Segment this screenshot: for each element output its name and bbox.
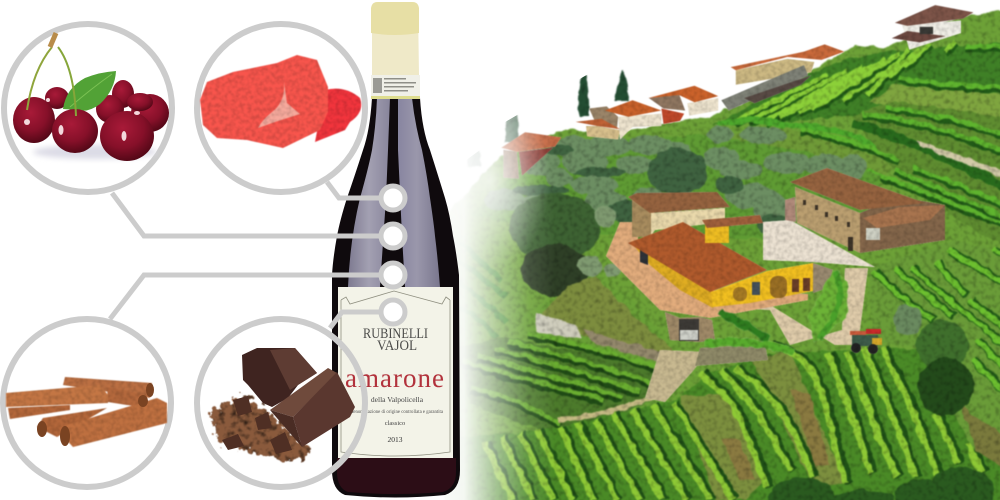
chocolate chunks — [222, 396, 292, 454]
brown soil — [722, 390, 830, 480]
front cherries — [13, 97, 154, 161]
stick ends — [37, 383, 154, 446]
connector: cinnamon — [110, 275, 382, 319]
olive tree — [893, 305, 922, 336]
chocolate block back — [242, 348, 317, 407]
vineyard landscape photo — [425, 0, 1000, 500]
bottom tree line — [768, 467, 994, 500]
producer name: RUBINELLI — [363, 326, 428, 342]
left house — [628, 192, 730, 237]
hillside base — [445, 10, 1000, 500]
east soil — [961, 405, 1000, 477]
leaf — [63, 71, 116, 111]
chocolate shavings — [210, 395, 310, 460]
mound — [537, 276, 672, 364]
back cherries — [45, 80, 169, 132]
dot markers — [381, 186, 405, 324]
terrace ground — [455, 338, 677, 431]
stone terrace wall — [915, 139, 1000, 184]
east vine rows shadow — [801, 49, 1000, 231]
east vineyard (scaled group) — [768, 240, 1000, 500]
lower hill (scaled group) — [445, 235, 1000, 500]
roads and courtyard — [606, 220, 875, 402]
dark round tree — [918, 357, 973, 415]
wine name: amarone — [345, 363, 445, 393]
callout connector lines and dots — [110, 182, 405, 328]
curved hedge — [718, 120, 899, 160]
front label — [338, 287, 453, 458]
olive grove ground — [470, 135, 880, 240]
olive trees — [485, 126, 867, 223]
east rows — [873, 248, 1000, 405]
east vineyard ground — [868, 240, 1000, 477]
upper vineyard ground — [713, 41, 1000, 134]
hillside terrain and vines — [445, 10, 1000, 500]
yellow winery — [628, 215, 833, 342]
label border — [341, 291, 450, 456]
chocolate block front — [270, 368, 355, 447]
upper vine rows — [734, 41, 956, 122]
grass terrace — [868, 85, 1000, 119]
connector: strawberry — [327, 182, 382, 198]
dark cypress trees — [468, 67, 628, 166]
producer name — [363, 326, 428, 354]
aroma circle: cinnamon — [3, 319, 171, 487]
east dark hedge — [853, 124, 1000, 194]
stems — [27, 33, 76, 116]
stone wall south — [582, 329, 669, 366]
neck capsule — [371, 2, 420, 99]
strawberry pieces — [200, 55, 361, 148]
vintage: 2013 — [388, 435, 403, 444]
left reflection — [348, 98, 390, 287]
classico: classico — [385, 420, 405, 427]
east vine rows — [801, 46, 1000, 229]
upper vine rows shadow — [735, 43, 957, 124]
aroma circle: chocolate — [197, 319, 365, 487]
pale olive trees — [577, 205, 620, 277]
shadow — [33, 145, 157, 159]
cherry highlights — [24, 98, 140, 141]
east terrace ground — [850, 101, 1000, 248]
aroma circle: dried strawberry — [197, 24, 365, 192]
west slope ground — [445, 235, 687, 457]
left vine rows shadow — [486, 402, 735, 500]
faded west rows — [450, 235, 506, 338]
denomination: denominazione di origine controllata e garantita — [351, 410, 444, 415]
cinnamon sticks — [6, 377, 167, 447]
lower glass tint — [337, 458, 456, 494]
misty fade on left of landscape — [425, 0, 640, 500]
right vine rows shadow — [703, 345, 985, 487]
round tree — [917, 320, 968, 370]
connector: chocolate — [330, 312, 382, 328]
stone wall west — [535, 314, 582, 339]
bottom vineyard ground — [445, 348, 1000, 500]
right vine rows — [700, 345, 982, 487]
soil strips — [680, 350, 845, 500]
east rows shadow — [875, 249, 1000, 406]
neck strip label — [371, 75, 420, 99]
dirt track — [558, 364, 679, 419]
hillside houses — [501, 44, 844, 179]
woodland shade — [521, 244, 589, 296]
grass mound and hedges — [705, 270, 848, 352]
producer name: VAJOL — [377, 338, 417, 354]
terrace rows — [463, 334, 670, 424]
left vine rows — [484, 402, 733, 500]
aroma circle: cherries — [4, 24, 172, 192]
right reflection — [398, 98, 440, 287]
stone farmhouse — [785, 168, 945, 253]
buildings — [501, 5, 973, 402]
appellation: della Valpolicella — [371, 395, 424, 404]
top villa — [892, 5, 973, 50]
glass body — [332, 90, 460, 498]
broadleaf tree — [509, 193, 601, 261]
tractor — [850, 329, 882, 354]
connector: cherry — [112, 193, 382, 236]
terrace rows shadow — [463, 336, 670, 426]
wine bottle — [332, 2, 460, 498]
grass slope — [698, 128, 920, 238]
upper hill (scaled group) — [445, 10, 1000, 500]
darker olive canopies — [512, 145, 793, 235]
